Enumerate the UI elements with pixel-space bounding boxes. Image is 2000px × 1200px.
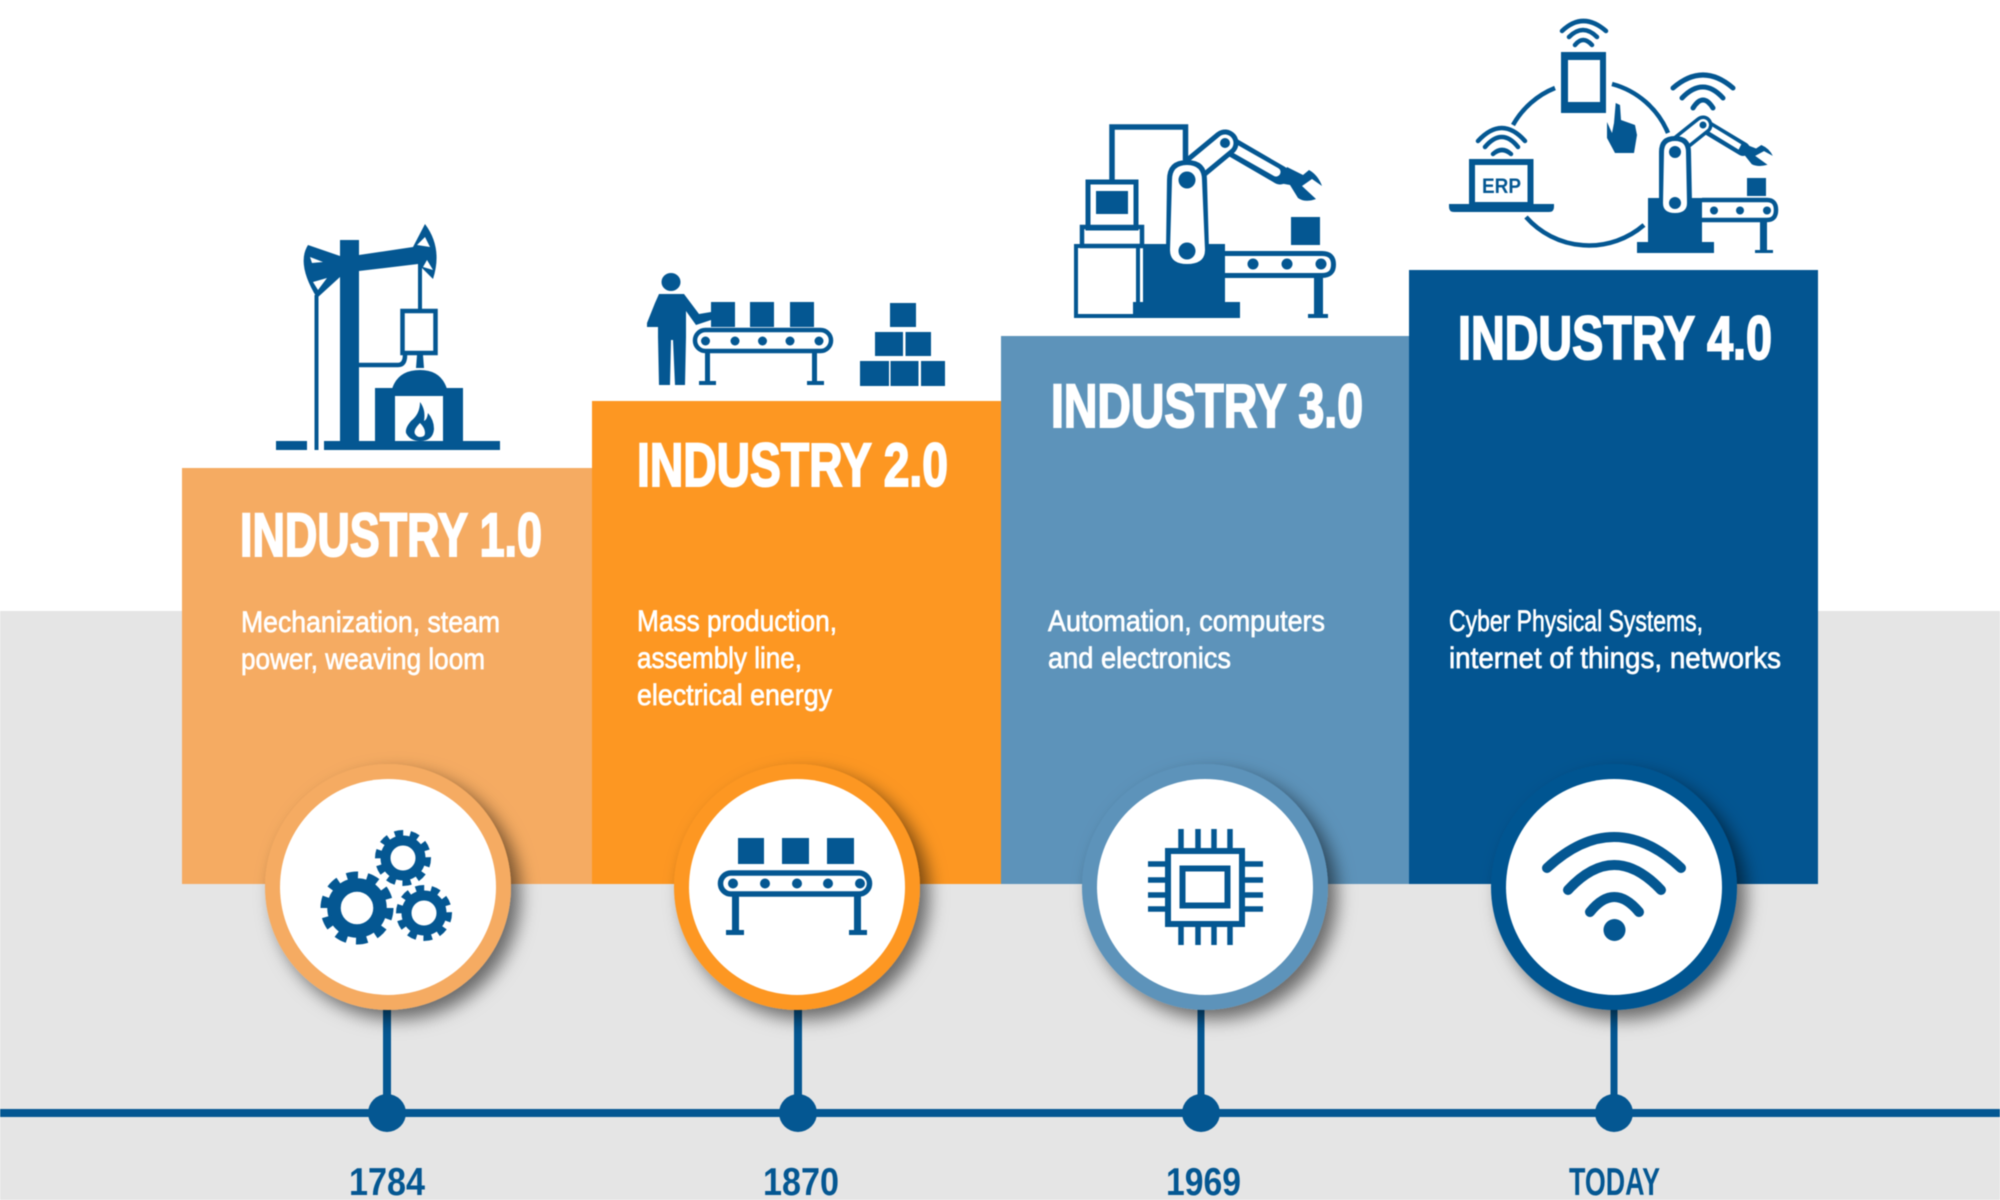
wifi above phone [1562, 21, 1606, 45]
badge: gears [265, 764, 511, 1010]
badge: wifi [1491, 764, 1737, 1010]
text: industry 2.0 description [637, 605, 837, 712]
badge: microchip [1082, 764, 1328, 1010]
text: industry 2.0 description: Mass production, [637, 605, 837, 638]
text: industry 4.0 description [1449, 605, 1781, 675]
panel: industry 4.0 [1409, 270, 1818, 884]
timeline marker today [1595, 1000, 1633, 1132]
timeline marker 1870 [779, 1000, 817, 1132]
robot arm on conveyor [1637, 122, 1776, 253]
timeline marker 1969 [1182, 1000, 1220, 1132]
panel: industry 2.0 [592, 401, 1001, 884]
icon: robot arm and assembly line (industry 3.0) [1076, 127, 1334, 318]
text: industry 4.0 description: Cyber Physical Systems, [1449, 605, 1703, 638]
grey background band [0, 611, 2000, 1200]
icon: microchip [1148, 829, 1263, 945]
panel: industry 3.0 [1001, 336, 1409, 884]
heading: industry 1.0: INDUSTRY 1.0 [240, 501, 542, 569]
text: industry 2.0 description: assembly line, [637, 642, 802, 675]
icon: connected devices, ERP, robot (industry 4.0) [1449, 21, 1776, 253]
icon: conveyor belt [720, 838, 870, 935]
heading: industry 4.0: INDUSTRY 4.0 [1458, 304, 1772, 372]
wifi above robot [1673, 75, 1733, 108]
phone [1561, 52, 1606, 113]
network circle [1513, 84, 1668, 245]
timeline axis [0, 1109, 2000, 1117]
icon: worker at conveyor with stacked boxes (industry 2.0) [647, 273, 945, 386]
panel: industry 1.0 [182, 468, 592, 884]
text: industry 1.0 description [241, 606, 500, 676]
timeline marker 1784 [368, 1000, 406, 1132]
heading: industry 3.0: INDUSTRY 3.0 [1051, 372, 1363, 440]
icon: pump and furnace (industry 1.0) [276, 224, 500, 450]
badge: conveyor [674, 764, 920, 1010]
stacked boxes [860, 303, 945, 386]
conveyor with boxes [695, 302, 831, 385]
text: industry 3.0 description: Automation, computers [1048, 605, 1325, 638]
text: industry 3.0 description [1048, 605, 1325, 675]
text: industry 2.0 description: electrical energy [637, 679, 832, 712]
ERP laptop [1449, 162, 1554, 212]
text: industry 3.0 description: and electronics [1048, 642, 1231, 675]
icon: wifi signal [1547, 837, 1681, 941]
text: industry 4.0 description: internet of things, networks [1449, 642, 1781, 675]
wifi above laptop [1478, 128, 1525, 154]
worker figure [647, 273, 711, 385]
text: industry 1.0 description: power, weaving loom [241, 643, 485, 676]
text: industry 1.0 description: Mechanization, steam [241, 606, 500, 639]
heading: industry 2.0: INDUSTRY 2.0 [637, 431, 948, 499]
ERP laptop: ERP [1482, 175, 1521, 198]
hand pointer [1607, 103, 1637, 153]
icon: gears [326, 834, 448, 940]
